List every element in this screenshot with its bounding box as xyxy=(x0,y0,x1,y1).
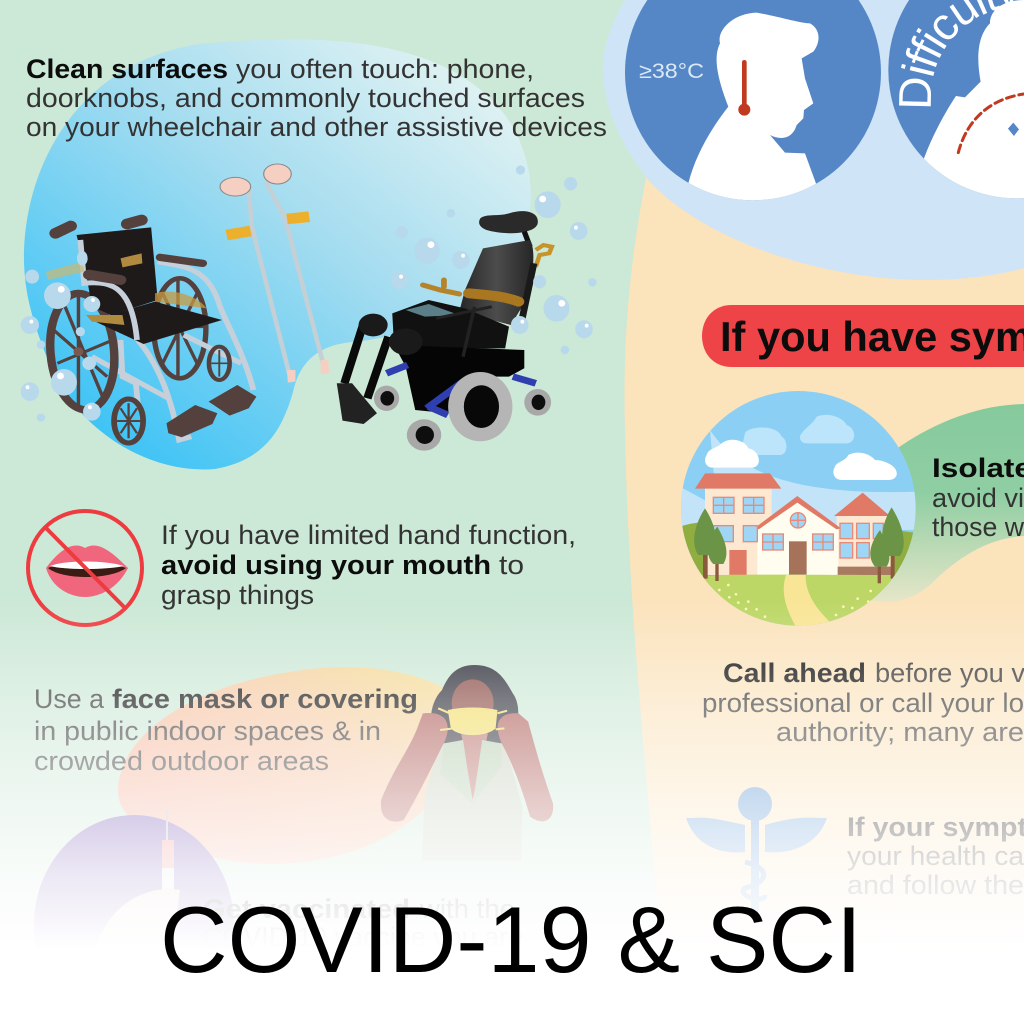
illustration: woman wearing mask xyxy=(381,665,553,861)
text: clean surfaces xyxy=(26,54,607,142)
text: if your symptoms: your health ca xyxy=(847,841,1024,871)
panel: vaccine blob with syringe xyxy=(34,810,234,1024)
text: limited hand function: to xyxy=(499,550,524,580)
text: if your symptoms: and follow the xyxy=(847,870,1024,900)
text: isolate xyxy=(932,453,1024,542)
text: call ahead: Call ahead xyxy=(723,658,866,688)
text: vaccinated xyxy=(203,894,543,981)
text: vaccinated: offered as soon as possible xyxy=(203,951,543,981)
icon: caduceus xyxy=(686,787,827,915)
text: face mask: crowded outdoor areas xyxy=(34,746,329,776)
text: call ahead: professional or call your lo xyxy=(702,688,1024,718)
title: COVID-19 & SCI xyxy=(160,887,862,992)
soap bubbles xyxy=(21,165,597,422)
manual wheelchair xyxy=(46,220,256,443)
text: call ahead xyxy=(702,658,1024,747)
text: clean surfaces: Clean surfaces xyxy=(26,54,228,84)
fever label: ≥38°C xyxy=(639,60,704,83)
panel: isolate green bubble xyxy=(870,404,1024,602)
text: vaccinated: COVID-19 vaccine you are xyxy=(203,922,523,952)
text: if your symptoms xyxy=(847,812,1024,900)
text: face mask: face mask or covering xyxy=(112,684,418,714)
text: clean surfaces: you often touch: phone, xyxy=(236,54,534,84)
icon: difficulty breathing circle xyxy=(888,0,1024,198)
icon: no mouth xyxy=(28,511,142,625)
text: vaccinated: with the xyxy=(419,894,515,924)
text: call ahead: before you v xyxy=(875,658,1024,688)
illustration: houses circle xyxy=(680,391,920,628)
text: isolate: Isolate xyxy=(932,453,1024,483)
power wheelchair xyxy=(337,211,552,451)
panel: symptoms blue blob xyxy=(603,0,1024,280)
illustration: manual wheelchair, crutches, power wheelchair xyxy=(21,164,597,451)
text: call ahead: authority; many are xyxy=(776,717,1024,747)
text: isolate: those w xyxy=(932,512,1024,542)
panel: clean surfaces blue blob xyxy=(24,39,531,469)
text: clean surfaces: on your wheelchair and other assistive devices xyxy=(26,112,607,142)
icon: fever circle xyxy=(625,0,881,213)
text: face mask xyxy=(34,684,418,776)
text: face mask: Use a xyxy=(34,684,105,714)
text: if your symptoms: If your sympt xyxy=(847,812,1024,842)
text: clean surfaces: doorknobs, and commonly touched surfaces xyxy=(26,83,585,113)
text: face mask: in public indoor spaces & in xyxy=(34,716,381,746)
text: vaccinated: Get vaccinated xyxy=(203,894,410,924)
panel: face mask blob xyxy=(118,667,478,864)
crutches xyxy=(220,164,329,383)
text: limited hand function: avoid using your mouth xyxy=(161,550,491,580)
white fade overlay xyxy=(0,600,1024,1024)
text: limited hand function: If you have limited hand function, xyxy=(161,520,576,550)
text: limited hand function: grasp things xyxy=(161,580,314,610)
text: isolate: avoid vi xyxy=(932,483,1024,513)
text: limited hand function xyxy=(161,520,576,610)
